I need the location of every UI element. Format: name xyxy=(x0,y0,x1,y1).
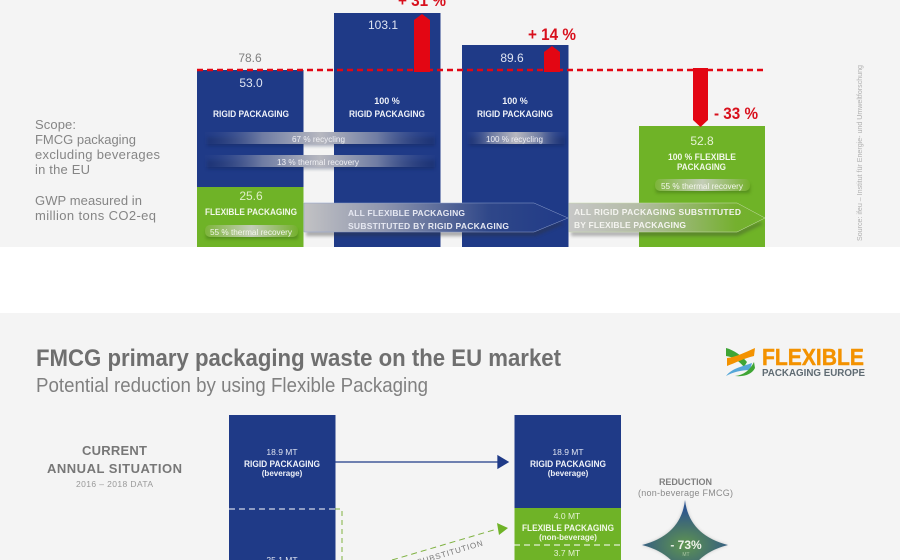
band: 67 % recycling xyxy=(205,132,435,146)
band: 13 % thermal recovery: 13 % thermal recovery xyxy=(277,158,359,167)
icon: reduction star xyxy=(642,500,728,560)
bar: 100 % rigid fully recycled: 100 % xyxy=(502,96,528,106)
scope text block: FMCG packaging xyxy=(35,132,136,147)
bar: 100 % rigid fully recycled xyxy=(462,45,568,247)
arrow: all rigid substituted by flexible: ALL RIGID PACKAGING SUBSTITUTED xyxy=(574,207,741,217)
bar: current waste: (beverage) xyxy=(262,469,303,478)
logo: Flexible Packaging Europe: PACKAGING EUROPE xyxy=(762,367,865,379)
arrow: all flexible substituted by rigid xyxy=(304,203,568,236)
heading: reduction: (non-beverage FMCG) xyxy=(638,488,733,498)
band: 55 % thermal recovery on flexible share xyxy=(205,225,298,239)
arrow: all flexible substituted by rigid: SUBSTITUTED BY RIGID PACKAGING xyxy=(348,221,509,231)
arrow: -33 % decrease xyxy=(693,68,708,127)
subtitle: Potential reduction by using Flexible Packaging xyxy=(36,375,428,397)
title: FMCG primary packaging waste on the EU market xyxy=(36,345,561,372)
arrow: all rigid substituted by flexible xyxy=(569,203,765,236)
bar: 100 % flexible: PACKAGING xyxy=(677,162,726,172)
bar: 100 % rigid with current recovery: 100 % xyxy=(374,96,400,106)
band: 67 % recycling: 67 % recycling xyxy=(292,135,345,144)
heading: current annual situation: CURRENT xyxy=(82,443,147,458)
bar: 100 % rigid with current recovery: RIGID PACKAGING xyxy=(349,109,425,120)
label: +14 %: + 14 % xyxy=(528,26,576,44)
bar: 100 % flexible: 100 % FLEXIBLE xyxy=(668,152,736,162)
arrow: substitution dashed path xyxy=(335,509,508,560)
bar: waste after substitution: 18.9 MT xyxy=(552,447,584,457)
logo: Flexible Packaging Europe xyxy=(726,344,865,379)
band: 100 % recycling xyxy=(467,132,565,146)
scope text block: million tons CO2-eq xyxy=(35,208,156,223)
bar: current waste xyxy=(229,415,336,560)
bar: 100 % flexible: 52.8 xyxy=(690,134,714,148)
bar: current mix rigid and flexible: FLEXIBLE PACKAGING xyxy=(205,207,297,218)
bar: waste after substitution: 3.7 MT xyxy=(554,548,580,558)
arrow: all rigid substituted by flexible: BY FLEXIBLE PACKAGING xyxy=(574,220,686,230)
bar: 100 % rigid fully recycled: RIGID PACKAGING xyxy=(477,109,553,120)
arrow: +31 % increase xyxy=(414,14,430,72)
scope text block xyxy=(35,117,160,223)
baseline: dashed reference line xyxy=(197,69,765,71)
bar: current waste: 18.9 MT xyxy=(266,447,298,457)
bar: waste after substitution: (beverage) xyxy=(548,469,589,478)
icon: reduction star: MT xyxy=(682,552,690,558)
bar: 100 % rigid with current recovery xyxy=(334,13,440,247)
bar: waste after substitution: RIGID PACKAGING xyxy=(530,459,606,470)
panel: packaging waste background xyxy=(0,313,900,560)
heading: current annual situation: 2016 – 2018 DATA xyxy=(76,479,153,489)
bar: current mix rigid and flexible: 53.0 xyxy=(239,76,263,90)
bar: 100 % rigid with current recovery: 103.1 xyxy=(368,18,398,32)
bar: 100 % flexible xyxy=(639,126,765,247)
scope text block: excluding beverages xyxy=(35,147,160,162)
bar: waste after substitution: (non-beverage) xyxy=(539,533,597,542)
source note: Source: ifeu – Institut für Energie- und Umweltforschung xyxy=(857,65,864,241)
arrow: beverage rigid stays rigid xyxy=(335,456,508,468)
band: 55 % thermal recovery on 100 % flexible: 55 % thermal recovery xyxy=(661,182,743,191)
heading: reduction: REDUCTION xyxy=(659,477,712,487)
scope text block: in the EU xyxy=(35,162,90,177)
bar: current waste: RIGID PACKAGING xyxy=(244,459,320,470)
label: -33 %: - 33 % xyxy=(714,105,758,123)
band: 13 % thermal recovery xyxy=(205,155,435,169)
bar: waste after substitution: 4.0 MT xyxy=(554,511,580,521)
heading: current annual situation xyxy=(47,443,182,489)
heading: current annual situation: ANNUAL SITUATION xyxy=(47,461,182,476)
band: 55 % thermal recovery on 100 % flexible xyxy=(655,179,750,193)
bar: 100 % rigid fully recycled: 89.6 xyxy=(500,51,524,65)
scope text block: GWP measured in xyxy=(35,193,142,208)
band: 55 % thermal recovery on flexible share: 55 % thermal recovery xyxy=(210,228,292,237)
scope text block: Scope: xyxy=(35,117,76,132)
bar: waste after substitution xyxy=(514,415,621,560)
arrow: all flexible substituted by rigid: ALL FLEXIBLE PACKAGING xyxy=(348,208,465,218)
bar: waste after substitution: FLEXIBLE PACKAGING xyxy=(522,523,614,534)
arrow: +14 % increase xyxy=(544,46,560,72)
heading: reduction xyxy=(638,477,733,498)
icon: reduction star: - 73% xyxy=(670,538,702,552)
bar: current mix rigid and flexible: RIGID PACKAGING xyxy=(213,109,289,120)
panel: GWP chart background xyxy=(0,0,900,247)
bar: current mix rigid and flexible xyxy=(197,51,304,247)
bar: current mix rigid and flexible: 78.6 xyxy=(238,51,262,65)
band: 100 % recycling: 100 % recycling xyxy=(486,135,543,144)
bar: current mix rigid and flexible: 25.6 xyxy=(239,189,263,203)
logo: Flexible Packaging Europe: FLEXIBLE xyxy=(762,344,864,370)
